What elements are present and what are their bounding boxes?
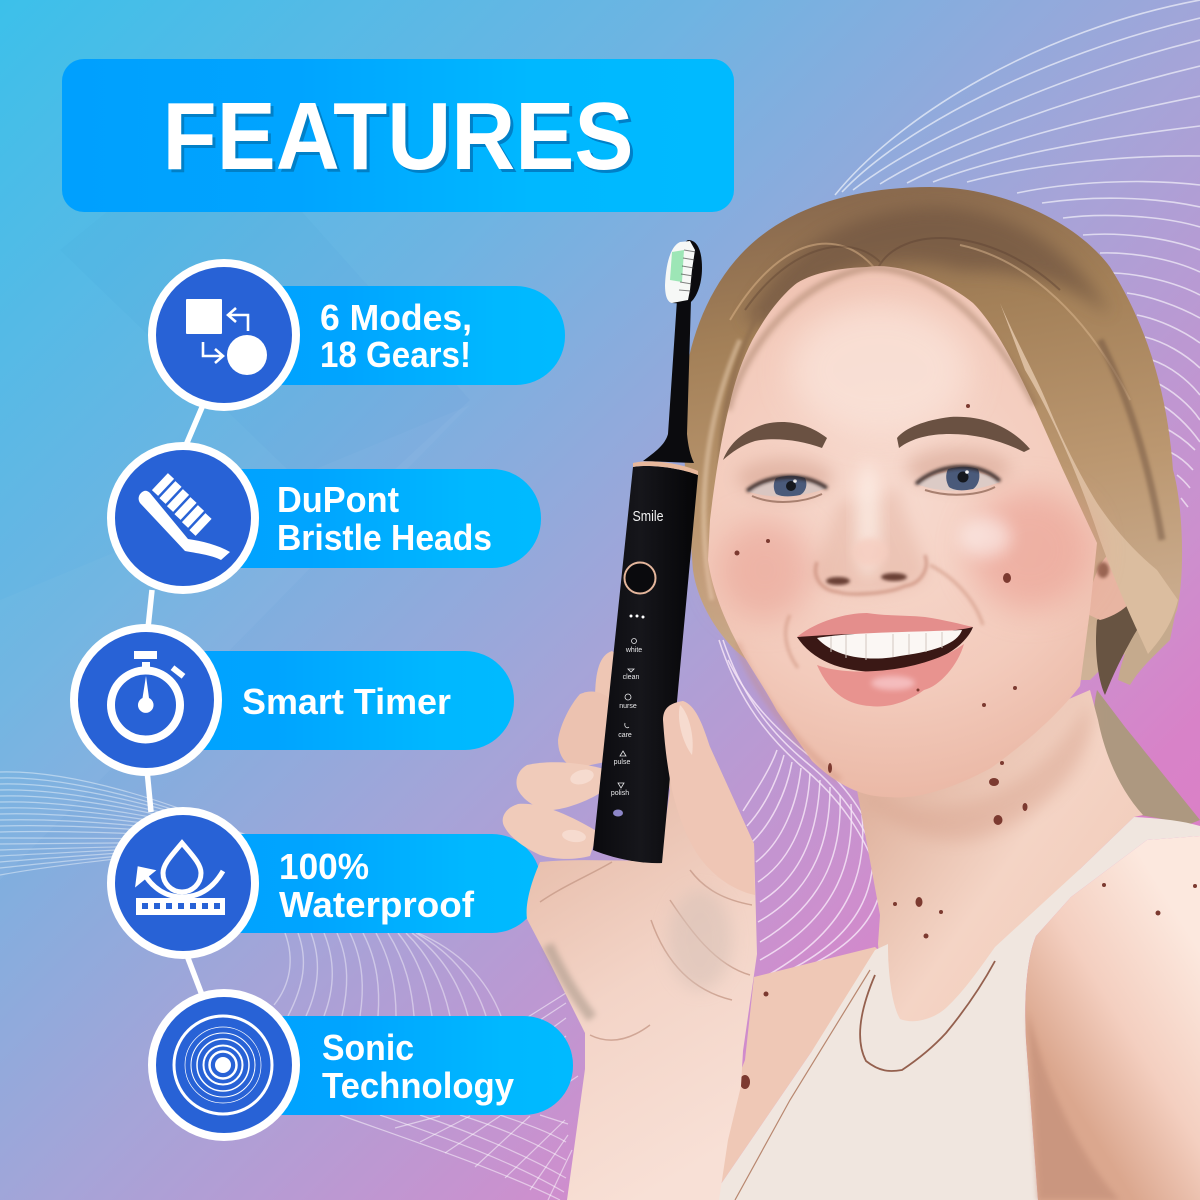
- handle body: [593, 466, 698, 863]
- hair crown shade: [745, 207, 1110, 325]
- neckline trim: [860, 961, 995, 1071]
- mode labels: clean: [623, 674, 639, 681]
- side seam: [735, 970, 870, 1200]
- armpit shade: [1028, 1010, 1120, 1200]
- swirl lines top right: [835, 0, 1200, 507]
- label 3: Smart Timer: [242, 681, 451, 722]
- palm creases: [540, 862, 752, 1040]
- nose bridge highlight: [856, 462, 880, 578]
- heading: FEATURES: [162, 83, 634, 190]
- finger nails: [561, 767, 595, 844]
- palm side shade: [668, 890, 732, 990]
- pill 5: [224, 1016, 573, 1115]
- nose: [816, 555, 926, 594]
- collar ring: [633, 461, 698, 475]
- feature 2: bristles: [111, 446, 541, 590]
- forehead highlight: [790, 305, 970, 435]
- pill 3: [146, 651, 514, 750]
- mouth interior: [797, 627, 973, 672]
- heading shadow: FEATURES: [166, 86, 636, 193]
- hair mass: [683, 187, 1182, 680]
- hair flap over ear: [1000, 303, 1178, 654]
- connector lines: [147, 405, 203, 995]
- label 2: DuPont: [277, 479, 399, 520]
- bristles: [665, 241, 695, 303]
- dark hair behind ear: [1096, 597, 1140, 695]
- bristle gaps: [679, 250, 696, 291]
- badge 4: [111, 811, 255, 955]
- palm: [527, 701, 757, 1200]
- badge 5: [152, 993, 296, 1137]
- logo: Smile: [632, 508, 664, 525]
- swirl arcs bottom centre: [274, 933, 501, 1016]
- power button: [624, 562, 656, 594]
- tank top: [710, 817, 1200, 1200]
- label 1: 6 Modes,: [320, 297, 472, 338]
- mode labels: care: [618, 732, 632, 739]
- teeth: [817, 630, 962, 659]
- badge 3: [74, 628, 218, 772]
- thumb: [663, 701, 755, 895]
- label 5: Technology: [322, 1065, 514, 1106]
- header banner: [62, 59, 734, 212]
- feature 5: sonic: [152, 993, 573, 1137]
- icon: toothbrush: [139, 476, 230, 560]
- icon: shapes and arrows: [186, 299, 267, 375]
- mouth: [797, 613, 973, 706]
- neck: [857, 690, 1143, 1030]
- brush shaft: [643, 300, 694, 463]
- left shoulder: [690, 947, 890, 1200]
- upper lip: [797, 613, 973, 637]
- cheek blush right: [968, 490, 1092, 610]
- icon: stopwatch: [111, 651, 185, 740]
- swirl arcs beside neck: [719, 640, 888, 975]
- wrist wrinkles: [548, 945, 592, 1018]
- finger: ring: [516, 762, 608, 810]
- feature 4: waterproof: [111, 811, 541, 955]
- cheek highlight: [959, 517, 1011, 557]
- pill 1: [224, 286, 565, 385]
- nose tip highlight: [852, 538, 888, 566]
- pill 2: [183, 469, 541, 568]
- finger: middle: [558, 692, 615, 768]
- loose strands: [1118, 600, 1178, 685]
- moles: [734, 404, 1197, 1089]
- left eyebrow: [723, 422, 827, 460]
- jaw shadow on face edge: [737, 643, 840, 780]
- mode labels: polish: [611, 790, 629, 797]
- lip shine: [871, 676, 915, 690]
- hairline shadow: [728, 268, 1035, 410]
- hair strands: [704, 238, 1162, 600]
- icon: sonic rings: [174, 1016, 272, 1114]
- eye socket shade: [737, 448, 1010, 498]
- charge badge: [613, 810, 623, 816]
- face: [708, 266, 1097, 798]
- feature 3: timer: [74, 628, 514, 772]
- mode labels: [611, 647, 642, 797]
- finger: index behind handle: [595, 651, 625, 720]
- right arm: [1025, 836, 1200, 1200]
- teeth gaps: [831, 632, 942, 660]
- label 4: Waterproof: [279, 884, 475, 925]
- mesh bottom centre: [340, 993, 578, 1200]
- ear shadow: [1097, 562, 1109, 578]
- badge 1: [152, 263, 296, 407]
- feature 1: modes: [152, 263, 565, 407]
- right eye: [916, 467, 1000, 495]
- label 2: Bristle Heads: [277, 517, 492, 558]
- cheek blush left: [717, 520, 813, 620]
- mode labels: pulse: [614, 759, 630, 766]
- label 5: Sonic: [322, 1027, 414, 1068]
- pill 4: [183, 834, 541, 933]
- swirl wave lower left: [0, 772, 262, 875]
- label 4: 100%: [279, 846, 369, 887]
- label 1: 18 Gears!: [320, 334, 471, 375]
- ponytail: [1094, 690, 1200, 824]
- smile lines: [786, 565, 983, 668]
- brush head: [672, 240, 702, 304]
- right eyebrow: [897, 417, 1030, 452]
- bristle highlight: [670, 250, 684, 282]
- finger: pinky: [503, 804, 598, 859]
- chin shadow: [850, 700, 1091, 841]
- thumb nail: [679, 705, 693, 755]
- background facets: [0, 120, 470, 880]
- mode labels: nurse: [619, 703, 637, 710]
- toothbrush: [593, 240, 702, 863]
- left eye: [747, 476, 827, 502]
- mode glyphs: [618, 638, 636, 788]
- icon: water drop and membrane: [136, 843, 225, 915]
- photo: woman: [503, 187, 1200, 1200]
- badge 2: [111, 446, 255, 590]
- mode labels: white: [625, 647, 642, 654]
- indicator dots: [630, 614, 644, 618]
- lower lip: [817, 644, 964, 706]
- nose shadow: [812, 485, 928, 593]
- ear: [1085, 553, 1140, 620]
